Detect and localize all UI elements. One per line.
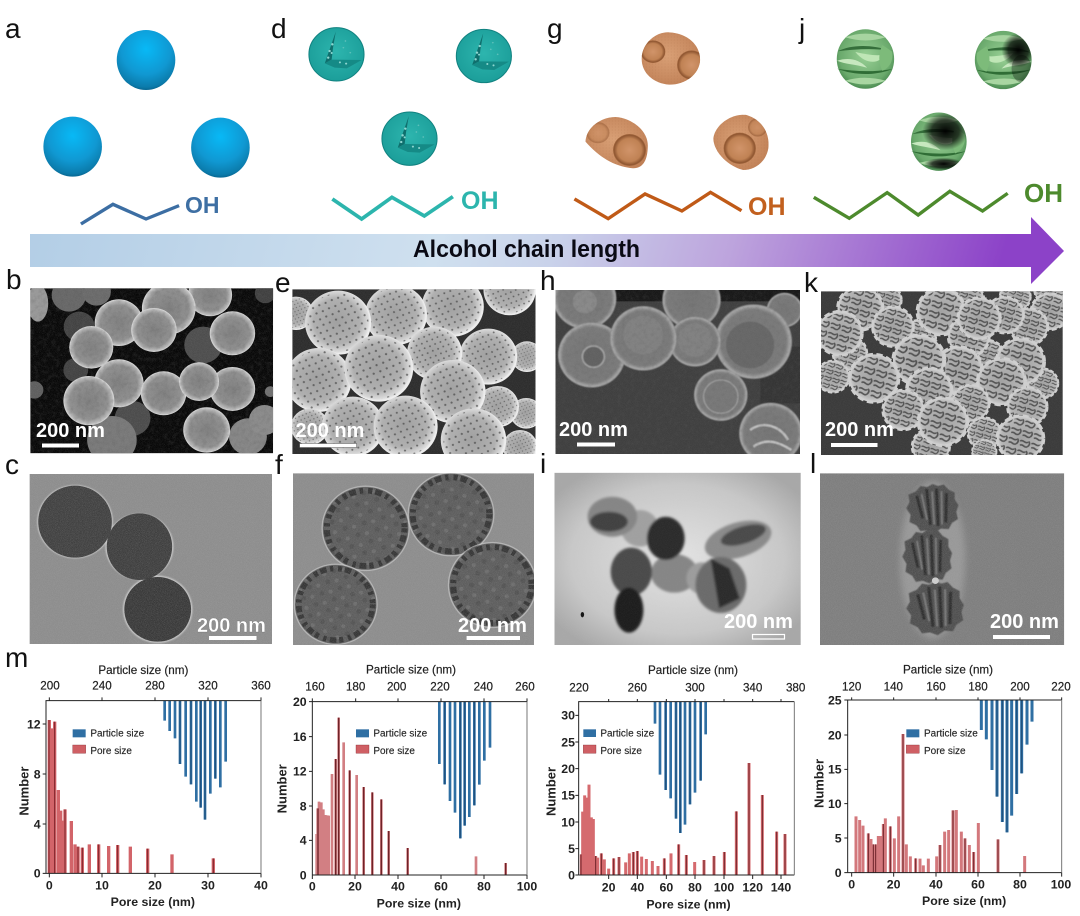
tick labels: 220 xyxy=(569,682,589,695)
scale bar h: 200 nm xyxy=(559,419,628,441)
red pore bars xyxy=(49,720,213,873)
tick labels: 25 xyxy=(561,735,575,749)
red pore bars xyxy=(317,718,506,875)
tick labels: 20 xyxy=(887,878,901,892)
tick labels: 30 xyxy=(561,709,575,723)
tick labels: 340 xyxy=(743,682,763,695)
axis titles xyxy=(16,664,195,909)
icon: green sphere bottom xyxy=(911,112,968,171)
tick labels: 4 xyxy=(300,834,307,848)
legend: Particle size xyxy=(373,729,428,740)
axis titles: Pore size (nm) xyxy=(646,897,731,911)
tick labels: 0 xyxy=(568,868,575,882)
tick labels: 160 xyxy=(926,681,946,694)
panel label k: k xyxy=(804,267,819,298)
icon: orange particle top xyxy=(642,32,700,85)
panel d: teal porous spheres xyxy=(309,28,511,219)
TEM image f xyxy=(293,473,534,645)
tick labels: 40 xyxy=(391,880,405,894)
tick labels: 200 xyxy=(1010,681,1030,694)
red pore bars xyxy=(581,763,785,875)
icon: green sphere right xyxy=(975,31,1035,89)
TEM image c xyxy=(30,474,272,644)
scale bar i: 200 nm xyxy=(724,611,793,633)
axis titles: Number xyxy=(275,764,290,813)
axis titles: Number xyxy=(544,767,559,816)
legend: Particle size xyxy=(924,729,978,740)
axis titles: Particle size (nm) xyxy=(366,663,456,676)
tick labels xyxy=(293,681,537,894)
axis titles: Pore size (nm) xyxy=(111,895,195,909)
tick labels: 260 xyxy=(515,681,535,694)
axis titles: Particle size (nm) xyxy=(648,664,738,677)
tick labels: 140 xyxy=(771,881,791,895)
axis titles: Number xyxy=(811,759,826,808)
TEM image l xyxy=(820,473,1064,645)
legend: Particle size xyxy=(90,729,145,740)
icon: teal sphere left xyxy=(309,28,364,81)
panel label b: b xyxy=(6,264,22,295)
tick labels: 240 xyxy=(474,681,494,694)
axis titles: Particle size (nm) xyxy=(98,664,188,677)
legend: Pore size xyxy=(90,746,132,757)
tick labels: 100 xyxy=(714,881,734,895)
panel label c: c xyxy=(5,449,19,480)
legend xyxy=(583,729,655,757)
chart: size distribution, pentanol xyxy=(544,664,806,911)
chart: size distribution, butanol xyxy=(275,663,537,910)
tick labels: 10 xyxy=(561,815,575,829)
tick labels: 160 xyxy=(305,681,325,694)
panel label e: e xyxy=(275,267,291,298)
panel label i: i xyxy=(540,448,546,479)
tick labels: 360 xyxy=(251,679,271,692)
icon: orange particle left xyxy=(586,117,648,168)
tick labels: 5 xyxy=(835,831,842,845)
icon: teal sphere right xyxy=(456,29,511,83)
tick labels: 60 xyxy=(971,878,985,892)
tick labels: 20 xyxy=(561,762,575,776)
tick labels: 0 xyxy=(309,880,316,894)
tick labels: 180 xyxy=(968,681,988,694)
blue particle bars xyxy=(655,702,706,833)
axis titles xyxy=(275,663,461,910)
SEM image k xyxy=(821,291,1063,455)
tick labels: 15 xyxy=(561,789,575,803)
tick labels: 5 xyxy=(568,842,575,856)
tick labels: 120 xyxy=(842,681,862,694)
icon: pentanol chain xyxy=(574,192,741,219)
tick labels: 40 xyxy=(254,878,268,892)
scale bar c: 200 nm xyxy=(197,615,266,637)
tick labels: 180 xyxy=(346,681,366,694)
tick labels xyxy=(27,679,271,892)
legend: Pore size xyxy=(600,746,642,757)
legend xyxy=(356,729,428,757)
panel label a: a xyxy=(5,13,21,44)
tick labels: 8 xyxy=(34,767,41,781)
tick labels: 0 xyxy=(835,866,842,880)
tick labels xyxy=(828,681,1071,892)
tick labels: 200 xyxy=(387,681,407,694)
chain label OH blue: OH xyxy=(185,192,220,218)
panel label d: d xyxy=(271,13,287,44)
axis titles: Pore size (nm) xyxy=(377,896,461,910)
tick labels: 16 xyxy=(293,730,307,744)
panel label l: l xyxy=(810,448,816,479)
legend: Particle size xyxy=(600,729,655,740)
tick labels: 10 xyxy=(828,797,842,811)
icon: propanol chain xyxy=(81,204,179,224)
tick labels: 25 xyxy=(828,693,842,707)
tick labels: 60 xyxy=(434,880,448,894)
tick labels: 320 xyxy=(198,679,218,692)
tick labels: 20 xyxy=(828,728,842,742)
blue particle bars xyxy=(439,702,490,838)
panel label f: f xyxy=(275,449,283,480)
arrow label: Alcohol chain length xyxy=(413,236,640,263)
tick labels: 30 xyxy=(201,878,215,892)
TEM image i xyxy=(554,472,801,645)
tick labels: 220 xyxy=(1051,681,1071,694)
legend xyxy=(906,729,978,757)
panel g: orange dimpled particles xyxy=(574,30,770,219)
tick labels: 60 xyxy=(659,881,673,895)
blue particle bars xyxy=(165,701,226,820)
axis titles: Pore size (nm) xyxy=(922,894,1006,908)
tick labels xyxy=(561,682,806,895)
tick labels: 8 xyxy=(300,799,307,813)
SEM image b xyxy=(30,288,274,454)
chain label OH green: OH xyxy=(1024,178,1063,208)
tick labels: 220 xyxy=(430,681,450,694)
axis titles xyxy=(811,663,1006,908)
icon: blue sphere right xyxy=(191,118,250,178)
panel label h: h xyxy=(540,265,556,296)
tick labels: 80 xyxy=(688,881,702,895)
tick labels: 120 xyxy=(742,881,763,895)
tick labels: 260 xyxy=(628,682,648,695)
scale bar l: 200 nm xyxy=(990,611,1059,633)
legend: Pore size xyxy=(373,746,415,757)
icon: hexanol chain xyxy=(814,191,1008,218)
axes xyxy=(844,697,1062,877)
tick labels: 15 xyxy=(828,763,842,777)
SEM image e xyxy=(292,289,536,454)
tick labels: 300 xyxy=(685,682,705,695)
icon: green sphere left xyxy=(837,29,894,89)
tick labels: 240 xyxy=(92,679,112,692)
tick labels: 12 xyxy=(27,718,41,732)
panel a: solid blue spheres xyxy=(43,30,250,224)
axis titles: Number xyxy=(16,767,31,816)
axes xyxy=(309,698,527,879)
tick labels: 100 xyxy=(1051,878,1071,892)
tick labels: 20 xyxy=(348,880,362,894)
arrow: alcohol chain length xyxy=(30,217,1064,284)
SEM image h xyxy=(556,290,800,454)
tick labels: 200 xyxy=(40,679,60,692)
tick labels: 0 xyxy=(46,878,53,892)
icon: orange particle right xyxy=(712,113,770,172)
tick labels: 280 xyxy=(145,679,165,692)
chain label OH orange: OH xyxy=(748,193,786,221)
tick labels: 4 xyxy=(34,817,41,831)
tick labels: 0 xyxy=(300,868,307,882)
tick labels: 20 xyxy=(602,881,616,895)
tick labels: 0 xyxy=(848,878,855,892)
tick labels: 12 xyxy=(293,765,307,779)
blue particle bars xyxy=(981,700,1032,832)
tick labels: 20 xyxy=(148,878,162,892)
tick labels: 100 xyxy=(517,880,537,894)
tick labels: 80 xyxy=(1013,878,1027,892)
axis titles: Particle size (nm) xyxy=(903,663,993,676)
chain label OH teal: OH xyxy=(461,187,498,215)
tick labels: 0 xyxy=(34,867,41,881)
scale bar e: 200 nm xyxy=(296,420,364,442)
red pore bars xyxy=(856,734,1025,873)
panel j: green ridged spheres xyxy=(814,29,1035,218)
tick labels: 40 xyxy=(929,878,943,892)
panel label m: m xyxy=(5,642,28,673)
panel label g: g xyxy=(547,13,563,44)
icon: teal sphere bottom xyxy=(382,112,437,165)
tick labels: 80 xyxy=(477,880,491,894)
scale bar b: 200 nm xyxy=(36,420,105,442)
axes xyxy=(575,699,794,879)
chart: size distribution, propanol xyxy=(16,664,271,909)
legend: Pore size xyxy=(924,746,966,757)
tick labels: 40 xyxy=(630,881,644,895)
chart: size distribution, hexanol xyxy=(811,663,1071,908)
icon: butanol chain xyxy=(332,197,453,219)
icon: blue sphere top xyxy=(117,30,175,90)
tick labels: 10 xyxy=(95,878,109,892)
axes xyxy=(43,697,261,877)
tick labels: 20 xyxy=(293,695,307,709)
axis titles xyxy=(544,664,738,911)
scale bar f: 200 nm xyxy=(458,615,527,637)
tick labels: 140 xyxy=(884,681,904,694)
legend xyxy=(73,729,145,757)
tick labels: 380 xyxy=(786,682,806,695)
scale bar k: 200 nm xyxy=(825,419,894,441)
panel label j: j xyxy=(798,13,805,44)
icon: blue sphere left xyxy=(43,117,102,177)
